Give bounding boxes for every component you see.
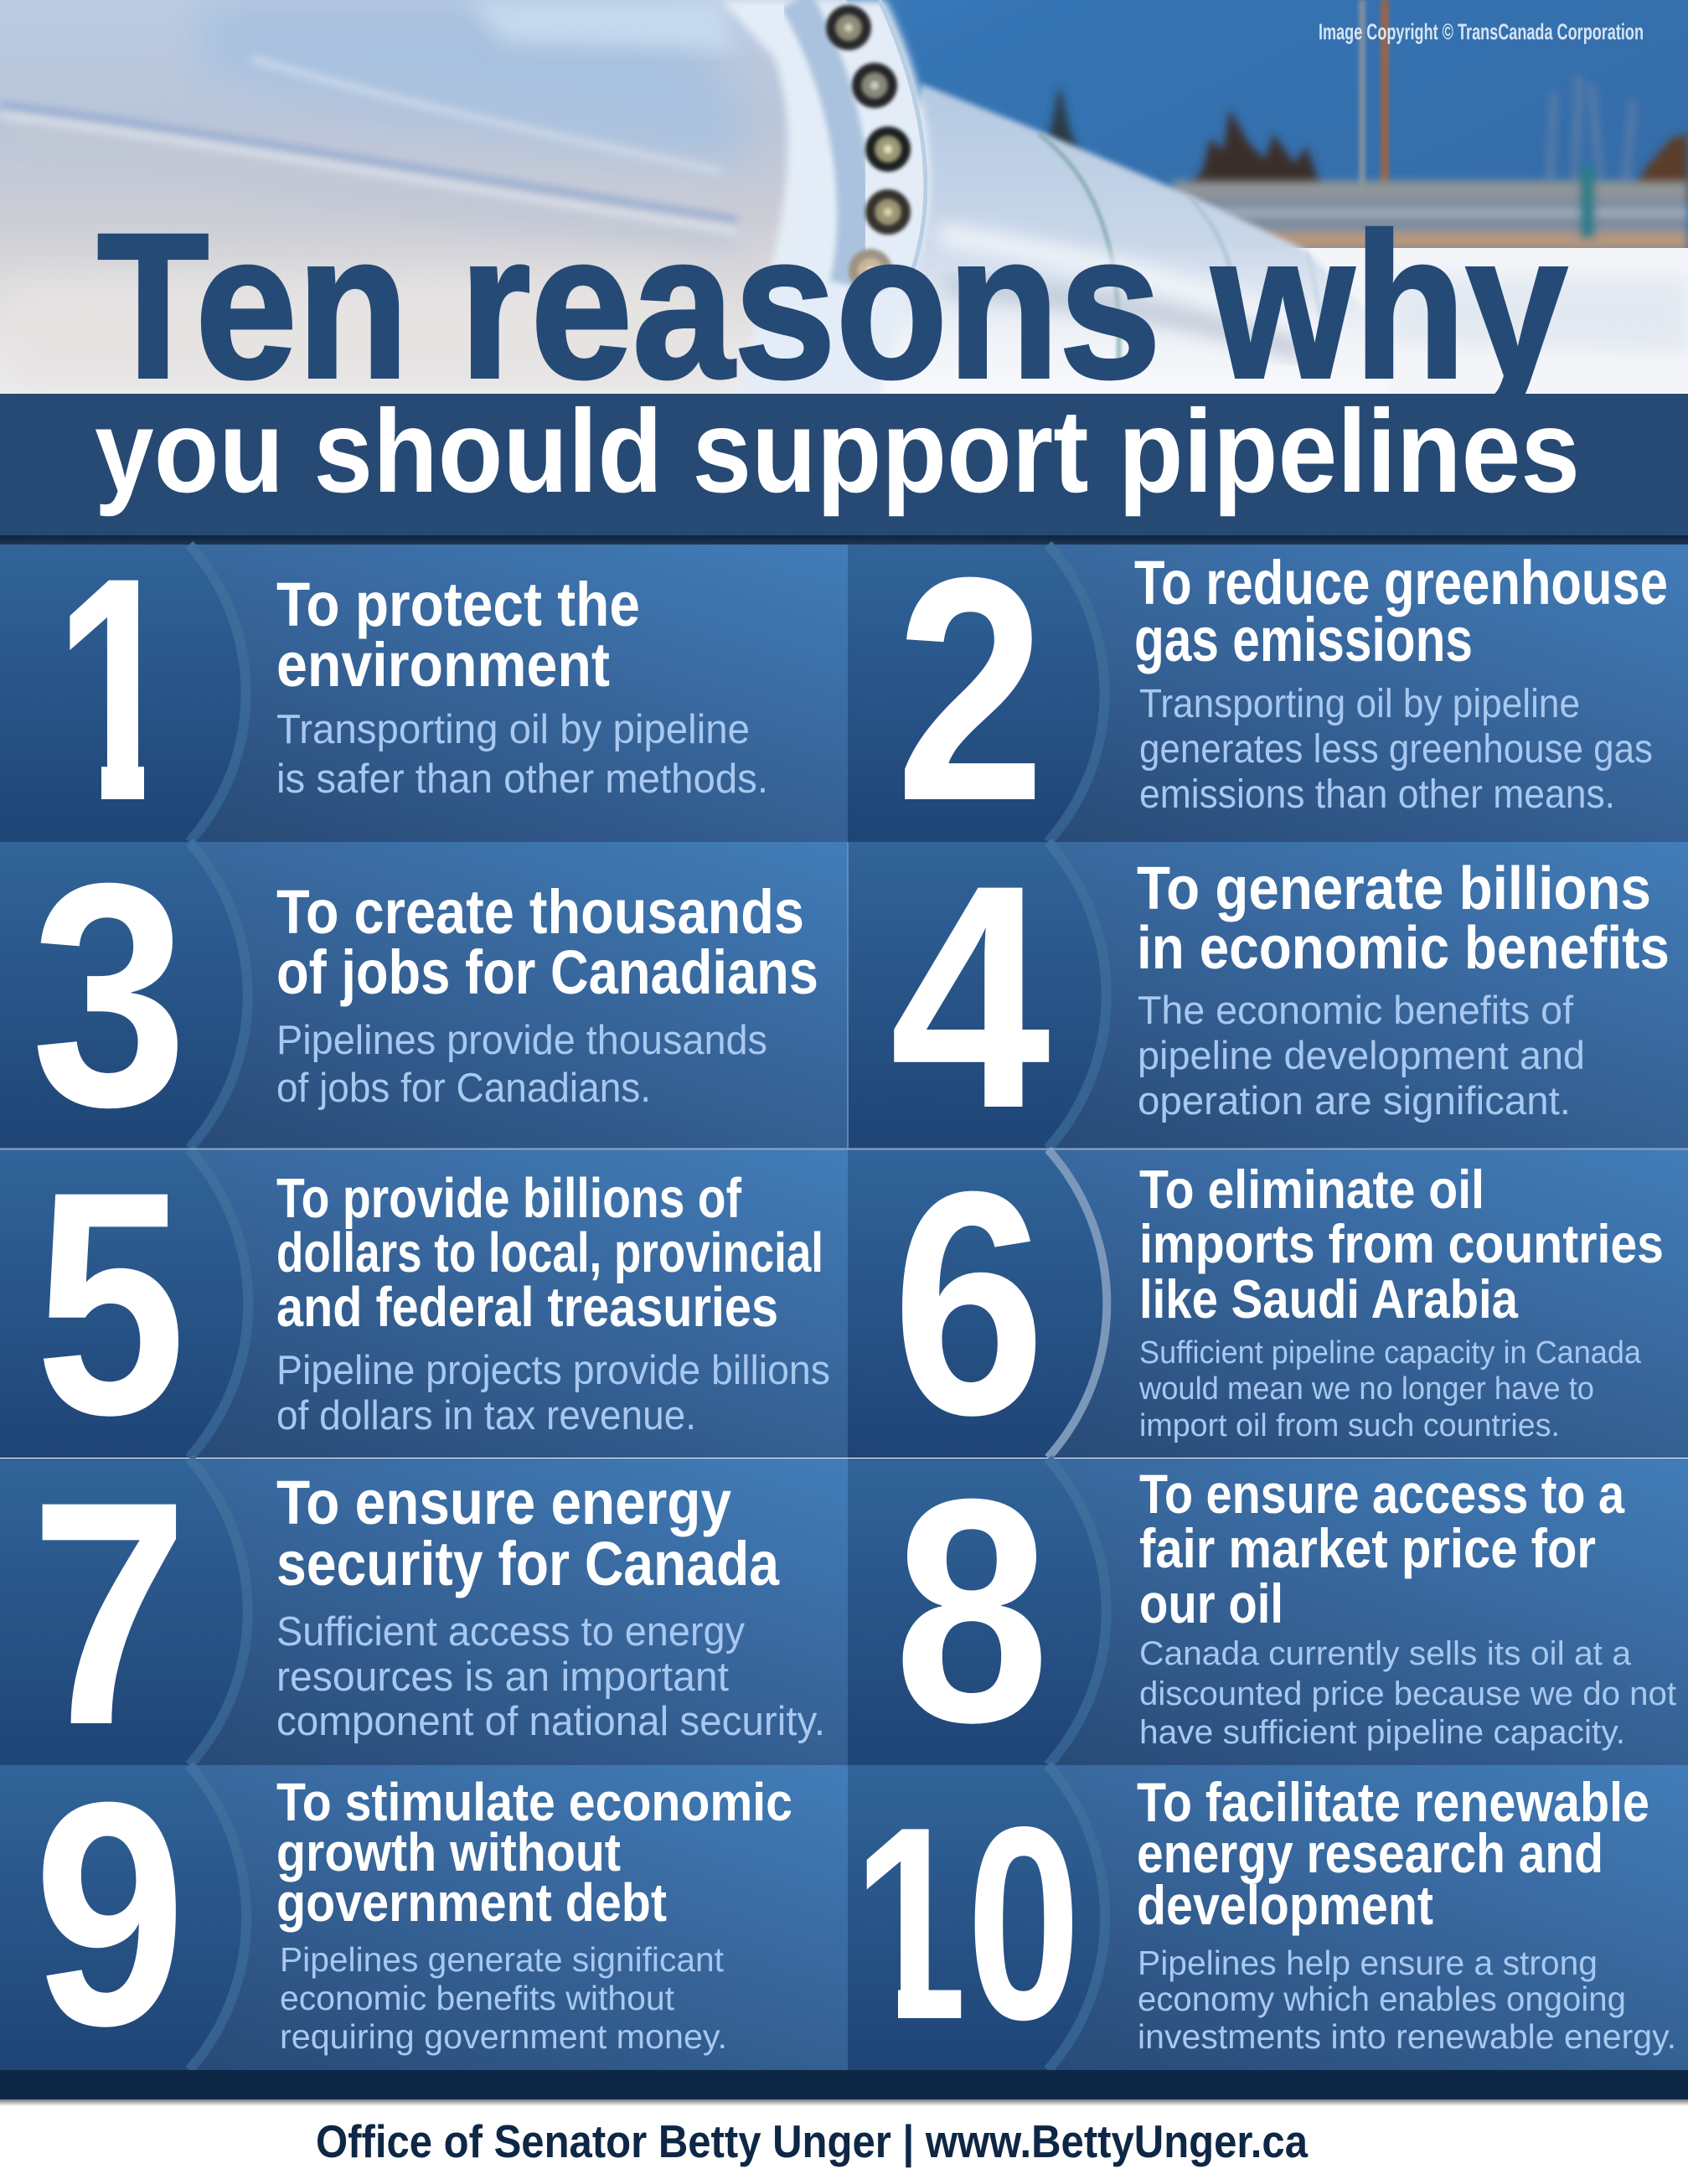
description: [1139, 682, 1653, 817]
description: component of national security.: [276, 1699, 825, 1744]
heading: growth without: [276, 1822, 621, 1882]
snow and lower pipe: [871, 248, 1688, 395]
panel: reason 10: [848, 1765, 1688, 2077]
heading: [1137, 855, 1670, 982]
description: would mean we no longer have to: [1138, 1371, 1594, 1407]
description: [276, 1609, 825, 1744]
description: economic benefits without: [280, 1979, 675, 2017]
description: [276, 1348, 830, 1438]
number 7: 7: [30, 1435, 188, 1791]
header photo: pipeline: [0, 0, 1688, 395]
heading: [1134, 548, 1668, 674]
description: generates less greenhouse gas: [1139, 727, 1653, 772]
heading: [276, 877, 818, 1007]
description: Pipelines provide thousands: [276, 1018, 767, 1063]
heading: [1137, 1771, 1649, 1936]
number 10: 10: [853, 1769, 1081, 2077]
description: The economic benefits of: [1138, 988, 1574, 1032]
heading: development: [1137, 1874, 1433, 1936]
number 2: 2: [896, 511, 1045, 867]
heading: [1139, 1159, 1664, 1330]
description: operation are significant.: [1138, 1078, 1571, 1123]
description: [1138, 1335, 1642, 1443]
heading: [276, 1167, 823, 1339]
description: Pipelines generate significant: [280, 1940, 725, 1979]
heading: government debt: [276, 1872, 667, 1933]
description: investments into renewable energy.: [1138, 2017, 1676, 2056]
bolts: [826, 5, 911, 292]
description: requiring government money.: [280, 2017, 727, 2056]
description: discounted price because we do not: [1139, 1675, 1676, 1712]
heading: environment: [276, 630, 610, 700]
description: [1139, 1635, 1676, 1751]
description: Sufficient access to energy: [276, 1609, 745, 1655]
description: [1138, 988, 1585, 1123]
footer text: Office of Senator Betty Unger | www.BettyUnger.ca: [316, 2115, 1308, 2168]
panel: reason 4: [848, 818, 1688, 1175]
panel: reason 7: [0, 1435, 848, 1791]
description: Pipeline projects provide billions: [276, 1348, 830, 1393]
description: economy which enables ongoing: [1138, 1980, 1626, 2018]
heading: [276, 1772, 792, 1933]
heading: To eliminate oil: [1139, 1159, 1484, 1220]
footer bar: [0, 2070, 1688, 2106]
heading: To create thousands: [276, 877, 804, 947]
number 8: 8: [894, 1433, 1050, 1789]
description: emissions than other means.: [1139, 772, 1615, 817]
description: of jobs for Canadians.: [276, 1066, 651, 1111]
number 9: 9: [34, 1736, 186, 2092]
description: [1138, 1944, 1676, 2056]
panel: reason 8: [848, 1433, 1688, 1789]
heading: To stimulate economic: [276, 1772, 792, 1832]
heading: [276, 1468, 780, 1598]
number 4: 4: [890, 818, 1052, 1175]
description: Sufficient pipeline capacity in Canada: [1139, 1335, 1642, 1371]
panel: reason 6: [848, 1125, 1688, 1481]
description: [280, 1940, 727, 2056]
heading: [1139, 1463, 1625, 1634]
heading: of jobs for Canadians: [276, 937, 818, 1007]
description: Canada currently sells its oil at a: [1139, 1635, 1632, 1672]
panel: reason 2: [848, 511, 1688, 867]
number 1: 1: [54, 511, 180, 867]
description: Transporting oil by pipeline: [1139, 682, 1580, 726]
number 6: 6: [892, 1125, 1045, 1481]
description: Transporting oil by pipeline: [276, 707, 750, 752]
heading: [276, 570, 640, 700]
panel: reason 5: [0, 1125, 848, 1481]
description: import oil from such countries.: [1139, 1408, 1560, 1443]
number 3: 3: [31, 817, 188, 1173]
number 5: 5: [35, 1125, 186, 1481]
heading: To protect the: [276, 570, 640, 639]
description: have sufficient pipeline capacity.: [1139, 1714, 1625, 1751]
heading: energy research and: [1137, 1822, 1603, 1884]
subtitle band: [0, 385, 1688, 545]
description: [276, 1018, 767, 1111]
heading: like Saudi Arabia: [1139, 1268, 1519, 1330]
heading: gas emissions: [1134, 605, 1473, 674]
heading: and federal treasuries: [276, 1276, 778, 1339]
heading: fair market price for: [1139, 1517, 1596, 1579]
panel: reason 1: [0, 541, 848, 842]
heading: our oil: [1139, 1572, 1283, 1634]
big pipe and flange: [0, 0, 896, 395]
description: is safer than other methods.: [276, 756, 768, 802]
description: [276, 707, 768, 802]
heading: To generate billions: [1137, 855, 1651, 922]
panel: reason 9: [0, 1736, 848, 2092]
heading: dollars to local, provincial: [276, 1221, 823, 1284]
description: resources is an important: [276, 1655, 729, 1700]
heading: To ensure energy: [276, 1468, 731, 1537]
description: of dollars in tax revenue.: [276, 1393, 696, 1438]
description: pipeline development and: [1138, 1033, 1585, 1077]
flange: [720, 0, 930, 395]
heading: security for Canada: [276, 1529, 780, 1598]
heading: To provide billions of: [276, 1167, 742, 1230]
panel: reason 3: [0, 817, 848, 1173]
description: Pipelines help ensure a strong: [1138, 1944, 1598, 1982]
